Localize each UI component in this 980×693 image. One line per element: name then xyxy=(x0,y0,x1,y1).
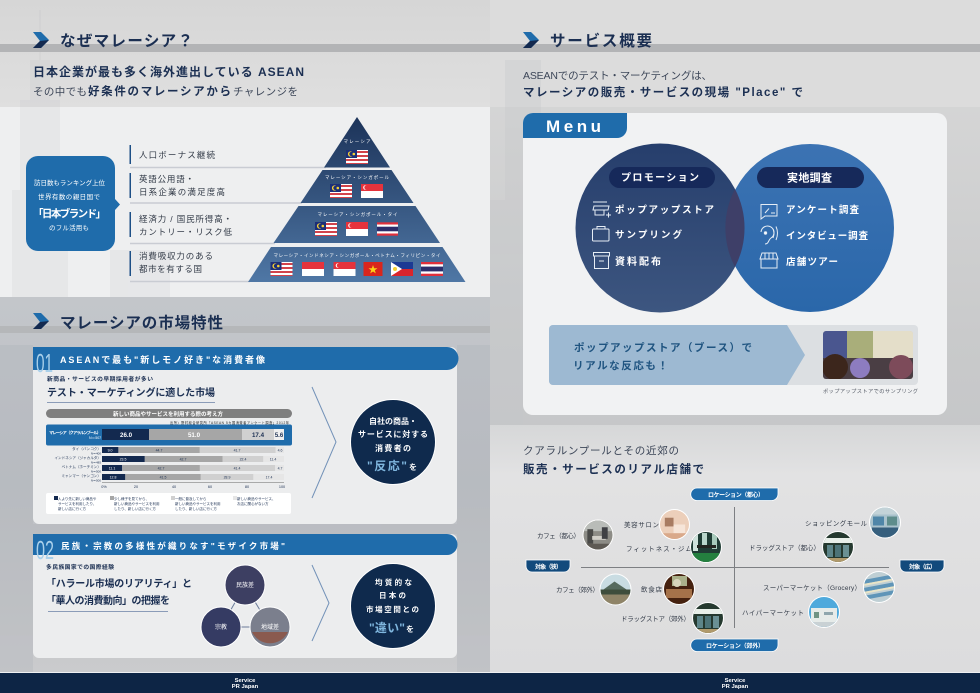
panel 01: 新しモノ好き xyxy=(33,347,458,524)
result circle: 違い: 市場空間との xyxy=(366,604,419,614)
bar row: Myanmar: 12.8 xyxy=(110,476,116,480)
legend: サービスを利用したり、 xyxy=(58,501,96,506)
store: ハイパーマーケット xyxy=(742,596,840,628)
menu tab: Menu xyxy=(546,117,601,136)
store: 飲食店 xyxy=(641,573,695,605)
text: real stores xyxy=(523,445,704,476)
bar row: Myanmar: 41.5 xyxy=(160,476,166,480)
store: ショッピングモール: ショッピングモール xyxy=(805,518,868,528)
banner: pop-up store reactions xyxy=(549,325,918,395)
legend: 新しい店に行く方 xyxy=(58,506,86,511)
result circle: 違い: 日本の xyxy=(379,590,406,600)
legend: したり、新しい店に行く方 xyxy=(114,506,156,511)
legend: したり、新しい店に行く方 xyxy=(175,506,217,511)
store: ドラッグストア（都心）: ドラッグストア（都心） xyxy=(749,543,820,552)
venn circle: 実地調査 xyxy=(726,144,894,312)
store: ショッピングモール xyxy=(805,506,901,538)
stacked bar chart: N＝507 xyxy=(89,436,101,440)
bar row: Thailand xyxy=(72,446,284,456)
highlighted bar: Malaysia: 17.4 xyxy=(252,432,265,439)
header bar 02: 02 xyxy=(36,535,54,565)
axis label: ロケーション（都心）: ロケーション（都心） xyxy=(708,491,764,499)
store: スーパーマーケット: スーパーマーケット（Grocery） xyxy=(763,584,861,592)
list of Malaysia strengths xyxy=(130,145,326,282)
icon: survey xyxy=(761,204,777,219)
survey menu: 実地調査 xyxy=(787,170,832,184)
store: ドラッグストア（都心） xyxy=(749,531,854,563)
survey menu: アンケート調査 xyxy=(786,204,859,216)
axis xyxy=(101,482,285,489)
bar row: Vietnam: 42.7 xyxy=(158,466,164,470)
list of Malaysia strengths: 日系企業の満足度高 xyxy=(139,187,225,197)
store: ハイパーマーケット: ハイパーマーケット xyxy=(742,609,804,617)
callout: 日本ブランド: のフル活用も xyxy=(49,223,89,232)
list of Malaysia strengths: 人口ボーナス継続 xyxy=(139,150,215,160)
subheading 02 xyxy=(46,563,192,612)
subheading 01: 新商品・サービスの早期採用者が多い xyxy=(47,375,153,383)
list of Malaysia strengths: 都市を有する国 xyxy=(139,264,202,274)
intro text: left: 好条件のマレーシアから xyxy=(88,84,231,98)
arrow 01 xyxy=(312,387,336,498)
result circle: 反応 xyxy=(350,400,436,484)
bar row: Thailand: 4.6 xyxy=(278,448,282,452)
header bar 02: 民族・宗教の多様性が織りなす"モザイク市場" xyxy=(61,541,285,551)
highlighted bar: Malaysia: 26.0 xyxy=(120,432,133,439)
axis: 20 xyxy=(134,485,138,489)
background: right page xyxy=(490,0,980,673)
axis label: 対象（広）: 対象（広） xyxy=(909,563,936,571)
legend: お店に関心がない方 xyxy=(237,501,269,506)
legend: 新しい商品やサービス、 xyxy=(237,496,276,501)
legend: 新しい商品やサービスを利用 xyxy=(114,501,160,506)
store: ドラッグストア（郊外）: ドラッグストア（郊外） xyxy=(621,614,690,623)
result circle: 違い: を xyxy=(406,625,414,634)
callout: 日本ブランド: 訪日数もランキング上位 xyxy=(34,178,106,187)
pyramid of ASEAN countries: マレーシア・インドネシア・シンガポール・ベトナム・フィリピン・タイ xyxy=(274,252,440,259)
bar row: Thailand: 44.7 xyxy=(156,448,162,452)
subheading 01: テスト・マーケティングに適した市場 xyxy=(47,386,215,399)
bar row: Indonesia xyxy=(54,455,284,464)
intro text: left: チャレンジを xyxy=(233,86,298,98)
highlighted bar: Malaysia: 51.0 xyxy=(188,432,201,439)
store: カフェ（都心）: カフェ（都心） xyxy=(537,531,580,540)
header bar 01: 01 xyxy=(36,348,53,378)
subheading 02: 多民族国家での国際経験 xyxy=(46,563,114,571)
footer bar: PR Japan xyxy=(232,684,259,690)
icon: ear xyxy=(761,226,778,244)
store: カフェ（都心） xyxy=(537,520,614,550)
bar row: Thailand: N＝400 xyxy=(91,452,101,456)
result circle: 違い: "違い" xyxy=(369,620,405,635)
diversity circles: 地域差 xyxy=(261,623,279,631)
footer bar: Service xyxy=(725,678,746,684)
pyramid of ASEAN countries xyxy=(248,117,466,282)
callout: 日本ブランド: 「日本ブランド」 xyxy=(33,207,106,220)
bar row: Indonesia: 11.4 xyxy=(270,458,276,462)
photo: sampling booth xyxy=(822,331,913,380)
icon: document box xyxy=(594,252,610,268)
footer bar: PR Japan xyxy=(722,684,749,690)
axis: 100 xyxy=(279,485,285,489)
axis label: ロケーション（都心） xyxy=(691,488,778,500)
header bar 01: ASEANで最も"新しモノ好き"な消費者像 xyxy=(60,354,265,365)
axis: 40 xyxy=(172,485,176,489)
list of Malaysia strengths: 消費吸収力のある xyxy=(139,251,213,261)
intro text: left: 日本企業が最も多く海外進出している ASEAN xyxy=(33,64,304,79)
highlighted bar: Malaysia xyxy=(102,429,284,440)
list of Malaysia strengths: 経済力 / 国民所得高・ xyxy=(139,214,232,224)
result circle: 反応: サービスに対する xyxy=(358,429,428,439)
bar row: Myanmar xyxy=(61,473,284,482)
store: フィットネス・ジム xyxy=(626,531,722,563)
axis: 60 xyxy=(208,485,212,489)
bar row: Indonesia: インドネシア（ジャカルタ） xyxy=(54,455,101,460)
icon: sampling bag xyxy=(592,226,609,241)
banner: pop-up store reactions: ポップアップストア（ブース）で xyxy=(574,341,752,354)
panel 02: モザイク市場 xyxy=(33,534,458,658)
subheading 02: 「ハラール市場のリアリティ」と xyxy=(46,577,192,590)
section heading: サービス概要: サービス概要 xyxy=(550,31,652,50)
diversity circles: 民族差 xyxy=(236,581,254,589)
icon: store xyxy=(760,253,778,268)
bar row: Myanmar: ミャンマー（ヤンゴン） xyxy=(61,473,101,478)
bar row: Myanmar: 28.9 xyxy=(224,476,230,480)
legend: 一般に普及してから xyxy=(175,496,206,501)
bar row: Vietnam xyxy=(62,464,284,474)
result circle: 反応: を xyxy=(409,463,417,472)
axis label: 対象（狭）: 対象（狭） xyxy=(535,563,562,571)
callout: 日本ブランド: 世界有数の親日国で xyxy=(38,192,100,201)
legend xyxy=(46,493,291,514)
bar row: Thailand: 9.0 xyxy=(108,448,112,452)
stacked bar chart xyxy=(46,409,292,514)
store: カフェ（郊外） xyxy=(556,574,632,606)
bar row: Indonesia: N＝485 xyxy=(91,460,101,464)
store: 美容サロン xyxy=(624,509,690,540)
intro text: left xyxy=(33,64,304,98)
venn circle: プロモーション: サンプリング xyxy=(615,229,682,241)
footer bar xyxy=(0,672,980,693)
footer bar: Service xyxy=(235,678,256,684)
pyramid of ASEAN countries: マレーシア xyxy=(344,139,371,145)
result circle: 違い: 均質的な xyxy=(375,577,412,587)
icon: pop-up store xyxy=(593,202,611,218)
bar row: Indonesia: 22.4 xyxy=(240,458,246,462)
section heading: なぜマレーシア？: なぜマレーシア？ xyxy=(60,32,193,50)
result circle: 違い xyxy=(350,564,436,648)
diversity circles: 宗教 xyxy=(215,623,227,631)
survey menu: インタビュー調査 xyxy=(786,230,868,242)
store: フィットネス・ジム: フィットネス・ジム xyxy=(626,545,692,553)
bar row: Myanmar: N＝500 xyxy=(91,478,101,482)
diversity circles xyxy=(201,565,290,647)
venn circle: プロモーション: ポップアップストア xyxy=(615,205,714,216)
venn overlap xyxy=(725,189,745,267)
bar row: Thailand: 41.7 xyxy=(234,448,240,452)
arrow 02 xyxy=(312,565,329,641)
venn circle: プロモーション xyxy=(576,144,744,312)
header bar 01 xyxy=(33,347,458,378)
text: real stores: 販売・サービスのリアル店舗で xyxy=(523,462,704,476)
axis label: ロケーション（郊外）: ロケーション（郊外） xyxy=(706,642,764,650)
intro text: right: ASEANでのテスト・マーケティングは、 xyxy=(523,69,712,82)
store: ドラッグストア（郊外） xyxy=(621,602,724,634)
store: 飲食店: 飲食店 xyxy=(641,584,662,594)
stacked bar chart: マレーシア（クアラルンプール） xyxy=(49,429,101,436)
positioning matrix xyxy=(526,488,944,652)
section heading: マレーシアの市場特性: マレーシアの市場特性 xyxy=(60,313,223,332)
pyramid of ASEAN countries: マレーシア・シンガポール・タイ xyxy=(318,211,398,218)
header stripes xyxy=(0,44,980,333)
survey menu: 店舗ツアー xyxy=(786,256,838,268)
subheading 01 xyxy=(47,375,215,403)
banner: pop-up store reactions: リアルな反応も！ xyxy=(573,360,668,372)
bar row: Thailand: タイ（バンコク） xyxy=(72,446,101,451)
pyramid of ASEAN countries: マレーシア・シンガポール xyxy=(325,174,390,181)
venn circle: プロモーション: プロモーション xyxy=(621,172,699,184)
survey menu xyxy=(757,167,868,268)
venn circle: プロモーション: 資料配布 xyxy=(615,255,661,268)
legend: 新しい商品やサービスを利用 xyxy=(175,501,221,506)
result circle: 反応: 自社の商品・ xyxy=(369,416,417,426)
axis: 0% xyxy=(101,485,107,489)
stacked bar chart: 新しい商品やサービスを利用する際の考え方 xyxy=(113,410,223,418)
store: 美容サロン: 美容サロン xyxy=(624,520,659,529)
legend: 少し様子を見てから、 xyxy=(114,496,149,501)
intro text: left: その中でも xyxy=(33,85,87,98)
highlighted bar: Malaysia: 5.6 xyxy=(275,433,284,439)
bar row: Vietnam: 4.7 xyxy=(278,466,282,470)
store: カフェ（郊外）: カフェ（郊外） xyxy=(556,585,599,594)
banner: pop-up store reactions: ポップアップストアでのサンプリング xyxy=(823,387,918,395)
list of Malaysia strengths: 英語公用語・ xyxy=(139,174,194,184)
list of Malaysia strengths: カントリー・リスク低 xyxy=(139,227,232,237)
bar row: Vietnam: N＝500 xyxy=(91,470,101,474)
bar row: Vietnam: ベトナム（ホーチミン） xyxy=(62,464,101,469)
intro text: right xyxy=(523,69,803,99)
result circle: 反応: "反応" xyxy=(367,459,407,473)
callout: 日本ブランド xyxy=(26,156,120,251)
bar row: Myanmar: 17.4 xyxy=(266,476,272,480)
bar row: Vietnam: 11.1 xyxy=(109,466,115,470)
menu tab xyxy=(523,113,627,138)
axis: 80 xyxy=(245,485,249,489)
header bar 02 xyxy=(33,534,458,565)
bar row: Vietnam: 41.4 xyxy=(234,466,240,470)
text: real stores: クアラルンプールとその近郊の xyxy=(523,445,679,457)
background: left page xyxy=(0,0,490,673)
intro text: right: マレーシアの販売・サービスの現場 "Place" で xyxy=(523,85,803,99)
result circle: 反応: 消費者の xyxy=(375,443,411,453)
axis label: 対象（広） xyxy=(900,560,944,572)
axis label: ロケーション（郊外） xyxy=(691,639,778,652)
bar row: Indonesia: 42.7 xyxy=(180,458,186,462)
store: スーパーマーケット xyxy=(763,571,895,603)
panel: Menu xyxy=(523,113,947,415)
stacked bar chart: 出所）野村総合研究所「ASEAN 5カ国消費者アンケート調査」2012年 xyxy=(170,420,290,425)
legend: 人より先に新しい商品や xyxy=(58,496,97,501)
bar row: Indonesia: 23.5 xyxy=(120,458,126,462)
subheading 02: 「華人の消費動向」の把握を xyxy=(46,594,170,607)
axis label: 対象（狭） xyxy=(526,560,570,572)
